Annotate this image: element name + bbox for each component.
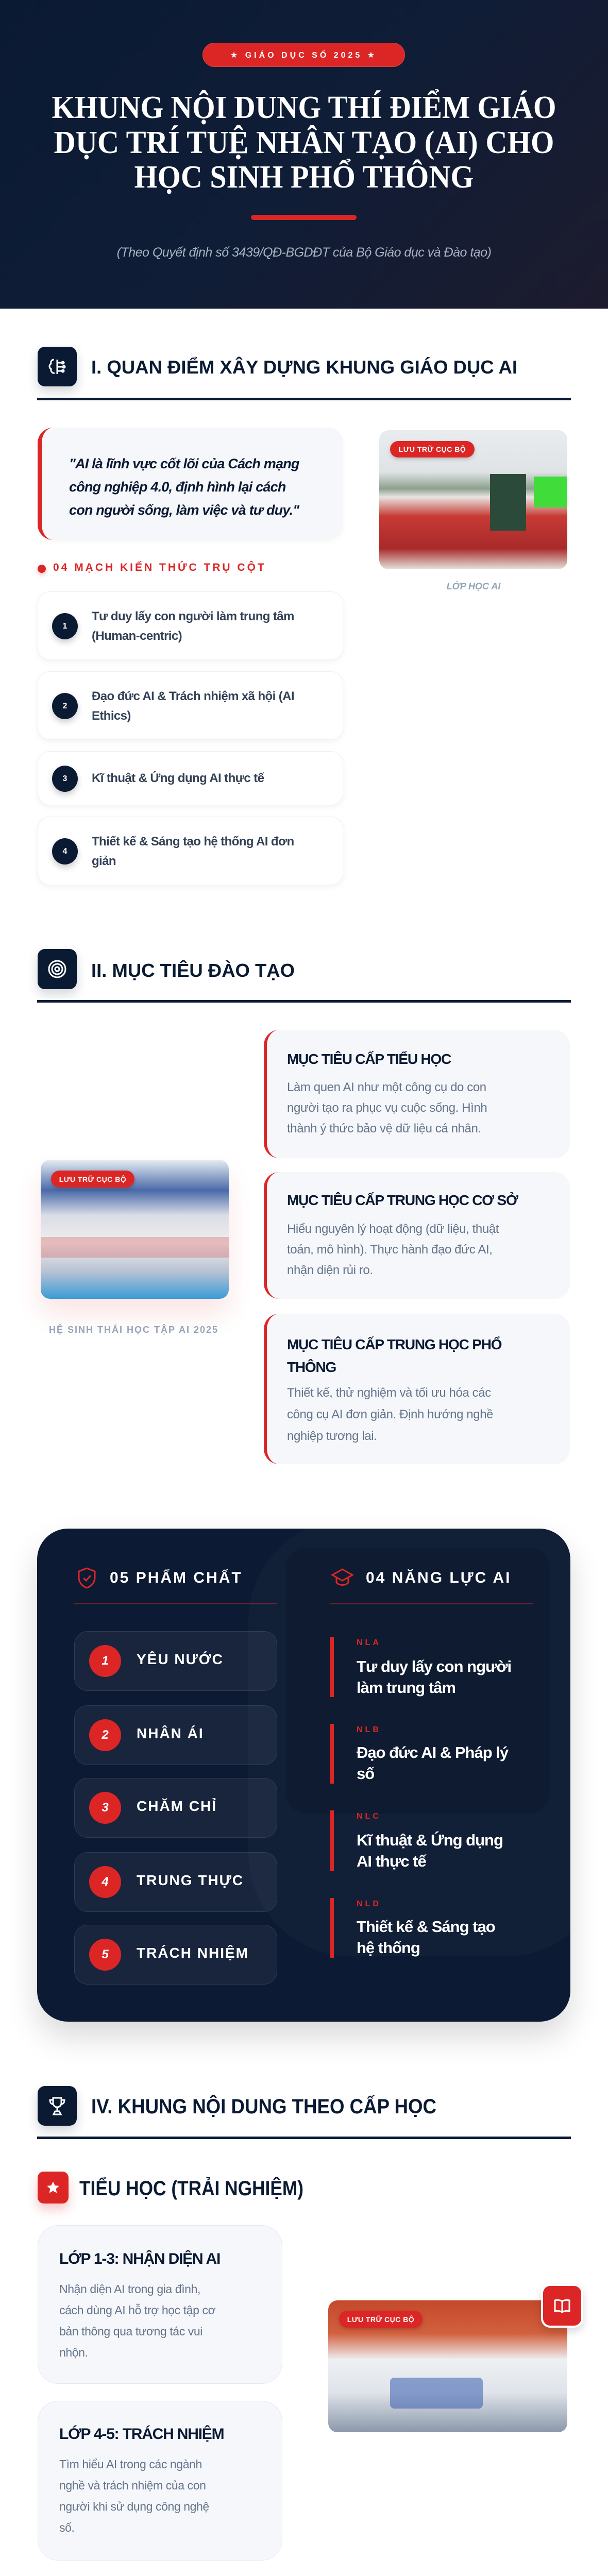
card: lớp 1-3 — [38, 2225, 282, 2384]
target card: tiểu học: MỤC TIÊU CẤP TIỂU HỌC — [287, 1051, 451, 1067]
label pill: LƯU TRỮ CỤC BỘ — [59, 1175, 126, 1183]
competency NLA: làm trung tâm — [357, 1679, 455, 1697]
label pill — [339, 2311, 423, 2328]
quality 2 — [74, 1705, 277, 1765]
card: lớp 4-5: LỚP 4-5: TRÁCH NHIỆM — [59, 2426, 224, 2443]
competency NLD: NLD — [357, 1900, 381, 1908]
target card: THCS: nhận diện rủi ro. — [287, 1263, 373, 1277]
quality 3: 3 — [102, 1801, 109, 1815]
quality 5 — [74, 1925, 277, 1985]
quality 1: 1 — [102, 1654, 109, 1668]
target card: THPT: Thiết kế, thử nghiệm và tối ưu hóa các — [287, 1386, 491, 1400]
badge: giáo dục số 2025: ★ GIÁO DỤC SỐ 2025 ★ — [230, 50, 377, 60]
header banner — [0, 0, 608, 309]
competency NLA: Tư duy lấy con người — [357, 1657, 511, 1675]
pillar card 3: 3 — [63, 774, 67, 783]
quality 3: CHĂM CHỈ — [137, 1798, 217, 1814]
competency NLD: hệ thống — [357, 1939, 420, 1957]
badge: giáo dục số 2025 — [202, 43, 405, 67]
target card: THPT: nghiệp tương lai. — [287, 1429, 377, 1443]
section III dark panel — [37, 1529, 570, 2022]
header: 05 phẩm chất: 05 PHẨM CHẤT — [110, 1569, 243, 1586]
quote box — [38, 428, 343, 540]
target card: THCS: toán, mô hình). Thực hành đạo đức AI, — [287, 1243, 492, 1257]
subheading: 04 mạch: 04 MẠCH KIẾN THỨC TRỤ CỘT — [53, 562, 266, 573]
pillar card 1 — [38, 591, 343, 660]
target card: THCS: Hiểu nguyên lý hoạt động (dữ liệu, thuật — [287, 1222, 499, 1236]
header: 04 năng lực AI: 04 NĂNG LỰC AI — [366, 1569, 511, 1586]
title: KHUNG NỘI DUNG THÍ ĐIỂM GIÁO — [52, 90, 556, 125]
label pill: LƯU TRỮ CỤC BỘ — [399, 445, 466, 453]
target card: tiểu học — [264, 1030, 570, 1158]
title — [52, 89, 556, 195]
label pill: LƯU TRỮ CỤC BỘ — [347, 2315, 414, 2324]
target card: tiểu học: Làm quen AI như một công cụ do con — [287, 1080, 486, 1094]
competency NLA: NLA — [357, 1638, 381, 1647]
header: 05 phẩm chất — [78, 1567, 243, 1589]
competency NLB: số — [357, 1765, 374, 1783]
competency NLA — [330, 1637, 511, 1697]
quote box: con người sống, làm việc và tư duy." — [69, 502, 299, 518]
target card: tiểu học: thành ý thức bảo vệ dữ liệu cá nhân. — [287, 1122, 481, 1136]
section I heading: I. QUAN ĐIỂM XÂY DỰNG KHUNG GIÁO DỤC AI — [91, 356, 517, 378]
quality 1: YÊU NƯỚC — [137, 1651, 224, 1667]
competency NLC — [330, 1810, 503, 1871]
card: lớp 4-5: số. — [59, 2521, 74, 2534]
red accent bar — [251, 215, 357, 220]
title: DỤC TRÍ TUỆ NHÂN TẠO (AI) CHO — [54, 125, 554, 160]
quality 5: TRÁCH NHIỆM — [137, 1945, 249, 1961]
quality 2: 2 — [102, 1728, 109, 1742]
pillar card 3 — [38, 751, 343, 805]
quote box: công nghiệp 4.0, định hình lại cách — [69, 479, 286, 495]
target card: THPT: công cụ AI đơn giản. Định hướng nghề — [287, 1408, 493, 1421]
pillar card 1: (Human-centric) — [92, 629, 182, 643]
pillar card 2 — [38, 671, 343, 740]
subheading: 04 mạch — [36, 561, 266, 577]
icon: trophy — [38, 2086, 77, 2126]
competency NLD: Thiết kế & Sáng tạo — [357, 1918, 495, 1936]
card: lớp 4-5 — [38, 2401, 282, 2561]
sub heading: tiểu học — [32, 2172, 303, 2215]
card: lớp 1-3: LỚP 1-3: NHẬN DIỆN AI — [59, 2250, 220, 2267]
section II heading — [33, 949, 571, 1003]
caption: HỆ SINH THÁI HỌC TẬP AI 2025 — [49, 1325, 218, 1335]
target card: THPT — [264, 1314, 570, 1464]
section I heading — [33, 347, 571, 400]
label pill — [51, 1171, 134, 1188]
card: lớp 4-5: nghề và trách nhiệm của con — [59, 2479, 206, 2492]
target card: THCS: MỤC TIÊU CẤP TRUNG HỌC CƠ SỞ — [287, 1192, 518, 1208]
competency NLB: Đạo đức AI & Pháp lý — [357, 1743, 508, 1761]
pillar card 2: Đạo đức AI & Trách nhiệm xã hội (AI — [92, 689, 294, 703]
target card: tiểu học: người tạo ra phục vụ cuộc sống. Hình — [287, 1101, 487, 1115]
quote box: "AI là lĩnh vực cốt lõi của Cách mạng — [69, 456, 299, 471]
quality 4 — [74, 1852, 277, 1912]
target card: THPT: MỤC TIÊU CẤP TRUNG HỌC PHỔ — [287, 1336, 501, 1352]
icon: book — [541, 2284, 583, 2328]
pillar card 4: 4 — [63, 847, 67, 855]
quality 1 — [74, 1631, 277, 1691]
card: lớp 1-3: Nhận diện AI trong gia đình, — [59, 2282, 200, 2296]
target card: THPT: THÔNG — [287, 1359, 336, 1375]
competency NLD — [330, 1898, 495, 1958]
pillar card 4: Thiết kế & Sáng tạo hệ thống AI đơn — [92, 835, 294, 849]
pillar card 3: Kĩ thuật & Ứng dụng AI thực tế — [92, 771, 264, 785]
card: lớp 1-3: cách dùng AI hỗ trợ học tập cơ — [59, 2303, 215, 2317]
pillar card 2: Ethics) — [92, 709, 131, 723]
pillar card 4 — [38, 817, 343, 885]
pillar card 4: giản — [92, 854, 116, 868]
pillar card 1: Tư duy lấy con người làm trung tâm — [92, 609, 294, 623]
card: lớp 1-3: nhộn. — [59, 2346, 88, 2359]
competency NLC: NLC — [357, 1812, 381, 1821]
card: lớp 4-5: người khi sử dụng công nghệ — [59, 2500, 209, 2513]
quality 3 — [74, 1778, 277, 1838]
photo: lớp học AI — [379, 430, 567, 569]
photo: robotics class — [328, 2300, 567, 2432]
quality 2: NHÂN ÁI — [137, 1725, 204, 1741]
card: lớp 4-5: Tìm hiểu AI trong các ngành — [59, 2458, 202, 2471]
quality 4: TRUNG THỰC — [137, 1872, 244, 1888]
competency NLC: AI thực tế — [357, 1852, 426, 1870]
pillar card 2: 2 — [63, 702, 67, 710]
icon: target — [38, 949, 77, 989]
icon: star — [38, 2172, 69, 2204]
target card: THCS — [264, 1172, 570, 1299]
quality 4: 4 — [102, 1875, 109, 1889]
competency NLB — [330, 1724, 509, 1784]
pillar card 1: 1 — [63, 621, 67, 631]
card: lớp 1-3: bản thông qua tương tác vui — [59, 2325, 202, 2338]
icon: brain chip — [38, 347, 77, 386]
photo: hệ sinh thái — [41, 1160, 229, 1299]
caption: LỚP HỌC AI — [447, 581, 500, 591]
label pill — [390, 441, 475, 457]
title: HỌC SINH PHỔ THÔNG — [134, 159, 474, 195]
competency NLB: NLB — [357, 1725, 381, 1734]
subtitle: (Theo Quyết định số 3439/QĐ-BGDĐT của Bộ Giáo dục và Đào tạo) — [117, 245, 491, 260]
section II heading: II. MỤC TIÊU ĐÀO TẠO — [91, 959, 295, 981]
competency NLC: Kĩ thuật & Ứng dụng — [357, 1831, 503, 1849]
quality 5: 5 — [102, 1947, 109, 1961]
section IV heading — [33, 2086, 571, 2139]
